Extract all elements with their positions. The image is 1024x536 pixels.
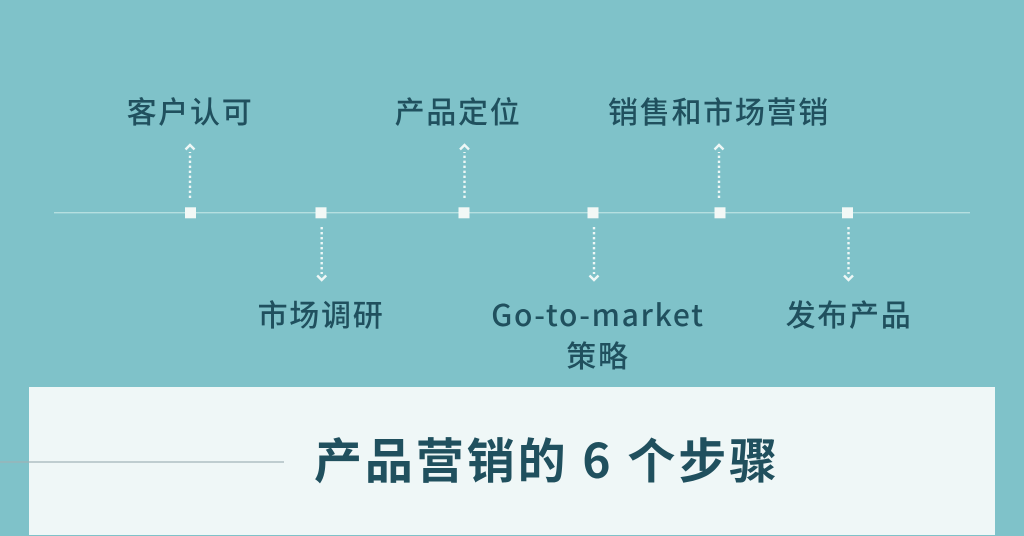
label: customer validation: 客户认可 xyxy=(127,88,253,132)
node 6 xyxy=(842,207,853,218)
title panel xyxy=(29,387,995,535)
label: go-to-market strategy: Go-to-market xyxy=(491,290,705,334)
node 1 xyxy=(185,207,196,218)
label: positioning: 产品定位 xyxy=(395,88,521,132)
node 3 xyxy=(458,207,470,218)
node 2 xyxy=(316,207,326,218)
label: market research: 市场调研 xyxy=(258,290,384,334)
arrow up 1 xyxy=(186,145,194,198)
decorative line xyxy=(0,461,284,462)
label: sales and marketing: 销售和市场营销 xyxy=(608,88,830,132)
label: launch: 发布产品 xyxy=(786,290,912,334)
label: go-to-market strategy xyxy=(491,290,705,376)
node 5 xyxy=(714,207,726,218)
arrow down 2 xyxy=(317,227,326,280)
node 4 xyxy=(588,207,598,218)
arrow up 3 xyxy=(460,145,469,198)
arrow down 4 xyxy=(590,227,598,280)
arrow down 6 xyxy=(844,227,853,280)
arrow up 5 xyxy=(714,145,724,198)
label: go-to-market strategy: 策略 xyxy=(566,332,630,376)
title: 产品营销的 6 个步骤 xyxy=(314,422,780,492)
